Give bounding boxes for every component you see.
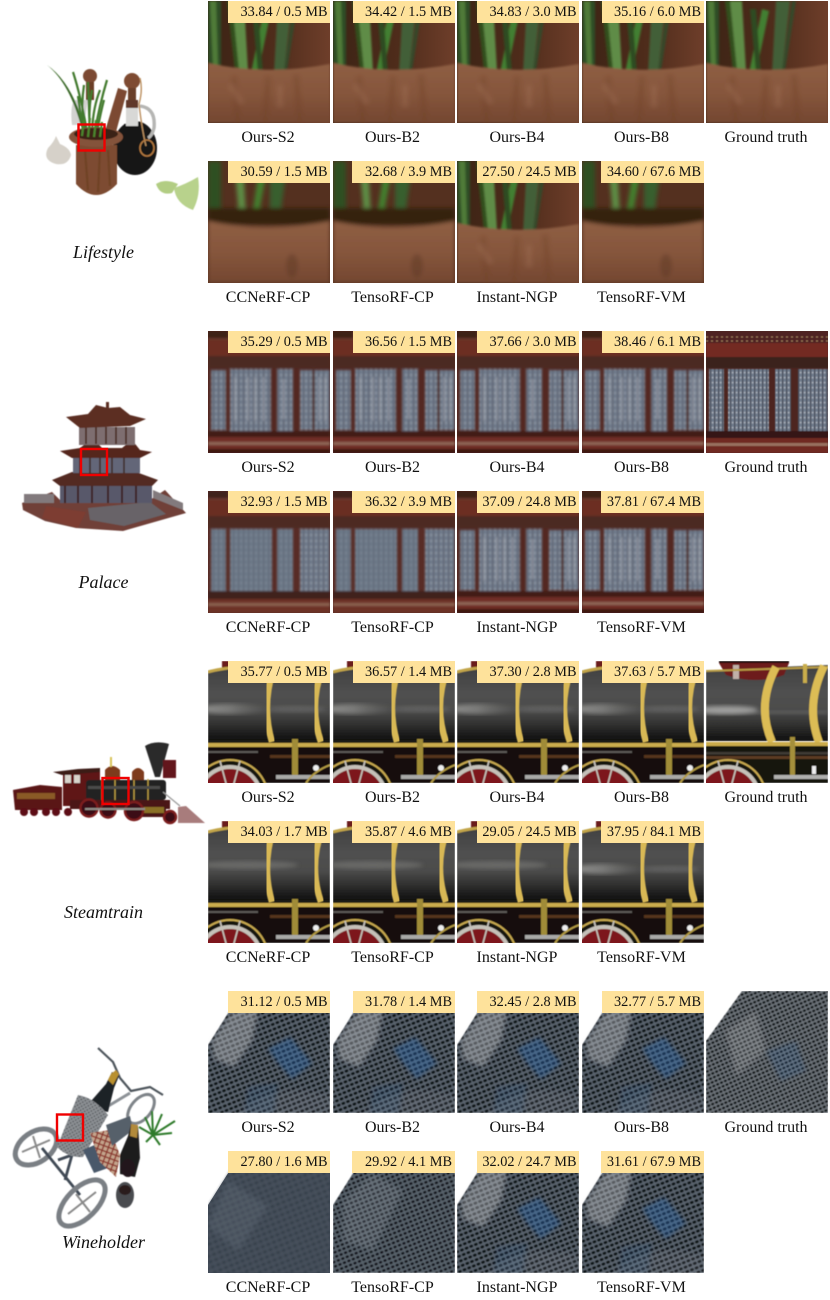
- lamp: [163, 760, 176, 778]
- tile: Ours-S2: Ours-S2: [241, 129, 295, 146]
- leaves: [156, 177, 199, 210]
- bottom wheel: [51, 1172, 113, 1234]
- tile: Ours-B2: [333, 1, 455, 146]
- tile: TensoRF-CP: TensoRF-CP: [351, 619, 434, 636]
- illustration: Wineholder object with zoom box: [12, 1046, 176, 1230]
- tile: Ground truth: [706, 991, 828, 1136]
- garlic: [46, 136, 71, 164]
- tile: Ours-B8: 38.46 / 6.1 MB: [614, 334, 701, 350]
- plant: [139, 1111, 175, 1145]
- tile: Ours-B8: [582, 1, 704, 146]
- tile: TensoRF-VM: TensoRF-VM: [597, 1279, 686, 1296]
- tile: TensoRF-VM: TensoRF-VM: [597, 949, 686, 966]
- tile: TensoRF-CP: TensoRF-CP: [351, 949, 434, 966]
- second bottle: [120, 1124, 140, 1177]
- tile: Ours-B8: [582, 991, 704, 1136]
- tile: TensoRF-CP: [333, 161, 455, 306]
- tile: Ours-B8: Ours-B8: [614, 129, 669, 146]
- tile: Ours-B4: [457, 1, 579, 146]
- tile: TensoRF-CP: [333, 821, 455, 966]
- panel: Palace scene: [21, 331, 828, 636]
- tile: Ours-B4: Ours-B4: [489, 129, 545, 146]
- tile: Ours-B4: [457, 991, 579, 1136]
- tile: Ours-B2: Ours-B2: [365, 789, 420, 806]
- tile: Ground truth: [706, 661, 828, 806]
- tile: Instant-NGP: [457, 1151, 579, 1297]
- tile: TensoRF-CP: [332, 1151, 454, 1297]
- bucket: [57, 1095, 108, 1157]
- tile: Instant-NGP: [457, 491, 579, 636]
- tile: TensoRF-CP: 36.32 / 3.9 MB: [365, 494, 452, 510]
- middle floor: [73, 456, 140, 473]
- tile: CCNeRF-CP: 27.80 / 1.6 MB: [241, 1154, 328, 1170]
- upper floor: [79, 427, 135, 445]
- tile: Ours-B4: 32.45 / 2.8 MB: [490, 994, 576, 1010]
- tile: TensoRF-VM: 31.61 / 67.9 MB: [607, 1154, 701, 1170]
- tile: Ground truth: [706, 1, 828, 146]
- tile: Ours-B4: Ours-B4: [489, 1119, 545, 1136]
- tile: TensoRF-CP: TensoRF-CP: [351, 1279, 434, 1296]
- zoom box: [102, 778, 128, 804]
- tile: Instant-NGP: 32.02 / 24.7 MB: [482, 1154, 576, 1170]
- drive wheels: [80, 800, 176, 823]
- palace base: [22, 490, 186, 531]
- tile: CCNeRF-CP: [208, 491, 330, 636]
- tile: Ours-B2: Ours-B2: [365, 1119, 420, 1136]
- tile: TensoRF-CP: 29.92 / 4.1 MB: [365, 1154, 452, 1170]
- top wheel: [122, 1090, 160, 1128]
- tile: CCNeRF-CP: CCNeRF-CP: [226, 949, 310, 966]
- tile: CCNeRF-CP: 30.59 / 1.5 MB: [241, 164, 328, 180]
- zoom box: [57, 1114, 83, 1140]
- tile: TensoRF-CP: 35.87 / 4.6 MB: [365, 824, 452, 840]
- tile: Ours-B4: Ours-B4: [489, 789, 545, 806]
- pot: [69, 118, 123, 195]
- tile: TensoRF-CP: [333, 491, 455, 636]
- tile: CCNeRF-CP: CCNeRF-CP: [226, 289, 310, 306]
- panel: Lifestyle scene: [46, 1, 828, 306]
- tile: Ours-B4: 37.66 / 3.0 MB: [490, 334, 576, 350]
- tile: Instant-NGP: [457, 821, 579, 966]
- tile: Ours-S2: 31.12 / 0.5 MB: [241, 994, 328, 1010]
- tile: Instant-NGP: Instant-NGP: [477, 949, 557, 966]
- zoom box: [78, 124, 104, 150]
- tile: Ground truth: Ground truth: [724, 129, 808, 146]
- chassis: [70, 800, 170, 809]
- frame: [42, 1148, 80, 1195]
- tile: Ours-B4: [457, 331, 579, 476]
- tile: Ours-B8: Ours-B8: [614, 459, 669, 476]
- tile: Ours-S2: Ours-S2: [241, 1119, 295, 1136]
- cab: [63, 772, 100, 806]
- tile: Ground truth: Ground truth: [724, 459, 808, 476]
- tile: Ours-B8: Ours-B8: [614, 1119, 669, 1136]
- wine bottle: [85, 1072, 119, 1112]
- tile: CCNeRF-CP: [208, 1151, 330, 1297]
- box and cloth: [83, 1140, 108, 1173]
- tile: Ground truth: Ground truth: [724, 1119, 808, 1136]
- tile: Instant-NGP: Instant-NGP: [477, 1279, 557, 1296]
- tile: Ours-B4: 37.30 / 2.8 MB: [490, 664, 576, 680]
- lower roof: [52, 472, 158, 486]
- cowcatcher: [178, 806, 205, 823]
- scene name: Palace: [78, 572, 128, 592]
- tile: Ours-S2: 35.29 / 0.5 MB: [241, 334, 328, 350]
- tile: Ours-S2: Ours-S2: [241, 459, 295, 476]
- tile: CCNeRF-CP: 32.93 / 1.5 MB: [241, 494, 328, 510]
- tile: Ours-B4: Ours-B4: [489, 459, 545, 476]
- scene name: Wineholder: [62, 1232, 145, 1252]
- tile: TensoRF-VM: 37.81 / 67.4 MB: [607, 494, 701, 510]
- tile: CCNeRF-CP: 34.03 / 1.7 MB: [241, 824, 328, 840]
- tile: Ours-B8: [582, 331, 704, 476]
- illustration: Palace object with zoom box: [21, 401, 186, 532]
- tile: Ground truth: Ground truth: [724, 789, 808, 806]
- tile: Ours-S2: [208, 1, 330, 146]
- grass and back bottle: [47, 65, 107, 138]
- domes: [105, 766, 144, 780]
- tile: Ours-S2: [208, 331, 330, 476]
- tile: CCNeRF-CP: CCNeRF-CP: [226, 1279, 310, 1296]
- tile: Ours-B8: 32.77 / 5.7 MB: [614, 994, 701, 1010]
- tile: Ours-S2: Ours-S2: [241, 789, 295, 806]
- tile: TensoRF-VM: 34.60 / 67.6 MB: [607, 164, 701, 180]
- tender: [13, 785, 62, 810]
- tile: Ours-B8: 37.63 / 5.7 MB: [614, 664, 701, 680]
- tile: Ours-B2: [333, 331, 455, 476]
- tile: Ours-B2: 31.78 / 1.4 MB: [365, 994, 452, 1010]
- glasses: [116, 1182, 134, 1208]
- tile: Ours-S2: 33.84 / 0.5 MB: [241, 4, 328, 20]
- panel: Wineholder scene: [12, 991, 828, 1296]
- tile: Instant-NGP: Instant-NGP: [477, 289, 557, 306]
- panel: Steamtrain scene: [12, 661, 828, 966]
- tender wheels: [20, 808, 72, 816]
- bottle: [113, 73, 157, 175]
- zoom box: [81, 449, 107, 475]
- top roof: [66, 405, 146, 428]
- illustration: Steamtrain object with zoom box: [12, 742, 206, 826]
- second bucket: [106, 1116, 133, 1146]
- tile: CCNeRF-CP: [208, 161, 330, 306]
- tile: Ours-B8: 35.16 / 6.0 MB: [614, 4, 701, 20]
- tile: Instant-NGP: 29.05 / 24.5 MB: [482, 824, 576, 840]
- tile: TensoRF-VM: TensoRF-VM: [597, 289, 686, 306]
- handle: [98, 1048, 163, 1095]
- tile: TensoRF-VM: 37.95 / 84.1 MB: [607, 824, 701, 840]
- tile: Ours-B8: [582, 661, 704, 806]
- tile: Ours-B8: Ours-B8: [614, 789, 669, 806]
- left wheel: [9, 1122, 63, 1172]
- tile: Ours-B2: [333, 991, 455, 1136]
- tile: Ours-B2: 36.57 / 1.4 MB: [365, 664, 452, 680]
- tile: Ours-S2: 35.77 / 0.5 MB: [241, 664, 328, 680]
- tile: Ours-B4: 34.83 / 3.0 MB: [490, 4, 576, 20]
- tile: CCNeRF-CP: [208, 821, 330, 966]
- scene name: Lifestyle: [73, 242, 134, 262]
- tile: Instant-NGP: Instant-NGP: [477, 619, 557, 636]
- tile: Ours-B2: Ours-B2: [365, 459, 420, 476]
- tile: Ours-B4: [457, 661, 579, 806]
- tile: CCNeRF-CP: CCNeRF-CP: [226, 619, 310, 636]
- tile: TensoRF-VM: [582, 1151, 704, 1297]
- tile: Ours-B2: 36.56 / 1.5 MB: [365, 334, 452, 350]
- boiler: [86, 780, 166, 800]
- tile: TensoRF-VM: [582, 161, 704, 306]
- scene name: Steamtrain: [64, 902, 143, 922]
- tile: Instant-NGP: 27.50 / 24.5 MB: [482, 164, 576, 180]
- illustration: Lifestyle object with zoom box: [46, 66, 200, 210]
- pestle: [106, 88, 127, 132]
- tile: TensoRF-VM: [582, 821, 704, 966]
- tile: TensoRF-CP: 32.68 / 3.9 MB: [365, 164, 452, 180]
- tile: TensoRF-CP: TensoRF-CP: [351, 289, 434, 306]
- tile: Ours-S2: [208, 661, 330, 806]
- tile: Ours-B2: Ours-B2: [365, 129, 420, 146]
- tile: Instant-NGP: 37.09 / 24.8 MB: [482, 494, 576, 510]
- tile: Ours-B2: [333, 661, 455, 806]
- tile: TensoRF-VM: [582, 491, 704, 636]
- ground floor: [60, 483, 152, 503]
- tile: TensoRF-VM: TensoRF-VM: [597, 619, 686, 636]
- tile: Ours-B2: 34.42 / 1.5 MB: [365, 4, 452, 20]
- stack: [145, 742, 169, 777]
- tile: Ours-S2: [208, 991, 330, 1136]
- tile: Instant-NGP: [457, 161, 579, 306]
- tile: Ground truth: [706, 331, 828, 476]
